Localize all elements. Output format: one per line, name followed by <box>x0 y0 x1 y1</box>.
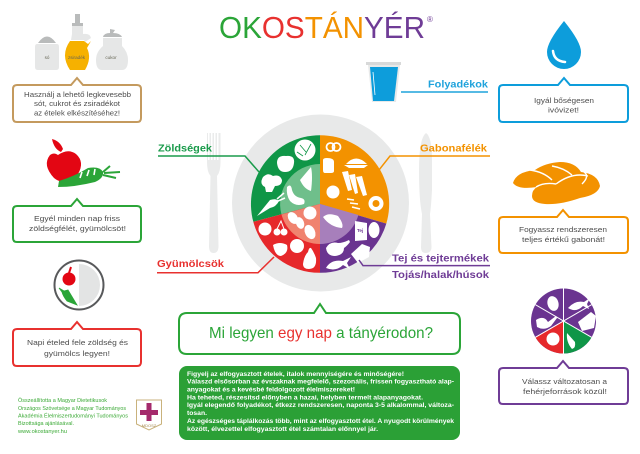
advice text panel: tosan. <box>187 410 207 417</box>
credits text <box>17 397 128 435</box>
icon: protein wheel <box>531 288 596 354</box>
icon: salt, fat and sugar containers: só <box>45 55 50 60</box>
label: vegetables: Zöldségek <box>158 142 212 154</box>
advice text panel: között, élvezettel elfogyasztott étel számtalan előnnyel jár. <box>187 426 378 433</box>
logo: MDOSZ <box>136 400 162 430</box>
sector: fruit <box>253 204 320 273</box>
callout: half of each meal: gyümölcs legyen! <box>44 349 110 358</box>
sector: vegetables <box>251 135 320 222</box>
callout: eat whole grains <box>499 210 628 253</box>
advice text panel: Igyál elegendő folyadékot, étkezz rendszeresen, naponta 3-5 alkalommal, változa- <box>187 402 454 409</box>
callout: half of each meal: Napi ételed fele zöldség és <box>27 338 128 347</box>
advice text panel: anyagokat és a kevésbé feldolgozott élelmiszereket! <box>187 386 355 394</box>
label: vegetables <box>158 142 259 172</box>
icon: fork <box>207 133 220 253</box>
credits text: www.okostanyer.hu <box>17 429 67 435</box>
callout: drink plenty of water: ivóvizet! <box>548 106 579 114</box>
sector: dairy, eggs, fish, meat <box>320 204 386 273</box>
label: dairy and proteins <box>359 252 490 281</box>
callout: varied protein sources: Válassz változatosan a <box>522 377 608 386</box>
advice text panel: Az egészséges táplálkozás több, mint az elfogyasztott étel. A nyugodt körülmények <box>187 418 455 425</box>
sector: grains <box>320 135 389 224</box>
label: dairy and proteins: Tej és tejtermékek <box>392 252 489 264</box>
callout: eat whole grains: Fogyassz rendszeresen <box>519 225 607 234</box>
label: grains: Gabonafélék <box>420 142 487 154</box>
advice text panel: Ha teheted, részesítsd előnyben a hazai, helyben termelt alapanyagokat. <box>187 394 423 402</box>
callout: varied protein sources <box>499 361 628 404</box>
callout: varied protein sources: fehérjeforrások közül! <box>523 387 607 396</box>
label: grains <box>379 142 490 170</box>
icon: knife <box>419 133 432 253</box>
sector: dairy, eggs, fish, meat: Tej <box>357 228 363 233</box>
credits text: Országos Szövetsége a Magyar Tudományos <box>18 406 126 412</box>
label: fruit: Gyümölcsök <box>157 258 224 270</box>
label: dairy and proteins: Tojás/halak/húsok <box>392 269 489 281</box>
icon: glass of water <box>366 62 401 102</box>
advice text panel <box>179 366 460 440</box>
icon: water drop <box>547 21 581 69</box>
callout: eat vegetables and fruit daily: zöldségfélét, gyümölcsöt! <box>29 224 126 233</box>
advice text panel: Válaszd elsősorban az évszaknak megfelelő, szezonális, frissen fogyasztható alap- <box>187 378 454 386</box>
label: fruit <box>157 257 274 273</box>
heading callout: Mi legyen egy nap a tányérodon? <box>209 325 433 342</box>
advice text panel: Figyelj az elfogyasztott ételek, italok mennyiségére és minőségére! <box>187 371 404 378</box>
heading callout <box>179 304 460 354</box>
callout: eat vegetables and fruit daily <box>13 199 141 242</box>
callout: use little salt, sugar and fat: sót, cukrot és zsiradékot <box>34 99 120 108</box>
label: fluids: Folyadékok <box>428 78 488 90</box>
callout: half of each meal <box>13 322 141 366</box>
icon: salt, fat and sugar containers: zsiradék <box>68 55 86 60</box>
title: ® <box>427 15 433 24</box>
plate chart <box>232 114 409 292</box>
icon: bread rolls <box>513 162 600 204</box>
logo: MDOSZ: MDOSZ <box>142 423 157 428</box>
callout: eat vegetables and fruit daily: Egyél minden nap friss <box>34 214 120 223</box>
credits text: Bizottsága ajánlásával. <box>18 421 74 427</box>
title: OKOSTÁNYÉR <box>219 10 425 45</box>
credits text: Akadémia Élelmiszertudományi Tudományos <box>18 412 128 420</box>
icon: salt, fat and sugar containers <box>35 14 128 70</box>
callout: use little salt, sugar and fat: az ételek elkészítéséhez! <box>34 108 120 118</box>
callout: drink plenty of water <box>499 78 628 122</box>
callout: drink plenty of water: Igyál bőségesen <box>534 96 594 105</box>
callout: use little salt, sugar and fat <box>13 78 141 122</box>
callout: use little salt, sugar and fat: Használj a lehető legkevesebb <box>24 90 131 99</box>
icon: salt, fat and sugar containers: cukor <box>105 55 117 60</box>
icon: apple and carrot <box>47 139 120 187</box>
icon: half plate with apple and carrot <box>54 260 104 310</box>
label: fluids <box>401 78 488 92</box>
credits text: Összeállította a Magyar Dietetikusok <box>18 397 107 404</box>
callout: eat whole grains: teljes értékű gabonát! <box>522 235 605 244</box>
